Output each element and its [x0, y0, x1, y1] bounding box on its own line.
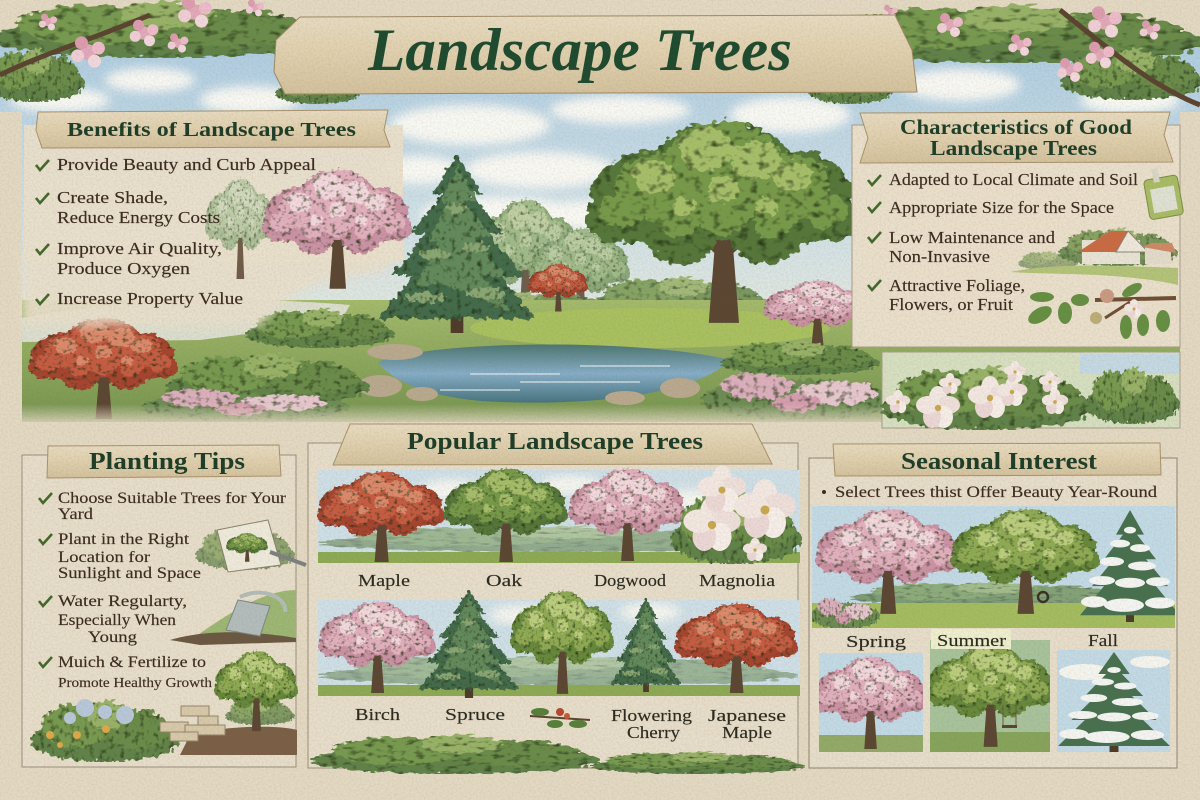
- row 1 labels: Maple: [358, 571, 410, 590]
- item: foliage: Flowers, or Fruit: [889, 295, 1013, 314]
- icon: berry sprig: [530, 708, 590, 728]
- spring tree: [815, 509, 960, 614]
- oak tree: [585, 121, 860, 323]
- tip: water: Especially When: [58, 612, 176, 629]
- tip: choose: [39, 490, 287, 523]
- tree: dogwood: [568, 469, 686, 561]
- pond reflections: [440, 366, 670, 390]
- illustration: fruit branch: [1025, 280, 1176, 339]
- benefit: air quality: [36, 239, 222, 278]
- panel background: [809, 458, 1177, 768]
- hazy tree over panel: [205, 179, 275, 279]
- benefit: shade: Create Shade,: [57, 188, 168, 207]
- sky: [0, 40, 1200, 340]
- illustration: flowering shrub strip: [880, 352, 1180, 430]
- conifer: [378, 155, 536, 333]
- illustration: young tree: [214, 651, 298, 731]
- row 2 labels: Flowering: [611, 706, 693, 725]
- benefit: air quality: Improve Air Quality,: [57, 239, 222, 258]
- item: foliage: Attractive Foliage,: [889, 276, 1025, 295]
- banner: [333, 424, 772, 465]
- row 2 labels: Spruce: [445, 705, 505, 724]
- banner: Planting Tips: [89, 449, 245, 475]
- parchment margins: [0, 112, 1200, 430]
- panel faded lower part: [22, 250, 400, 325]
- banner: Seasonal Interest: [901, 449, 1097, 475]
- row 1 labels: [358, 571, 776, 590]
- label: fall: Fall: [1088, 631, 1118, 650]
- banner: [36, 110, 390, 148]
- item: climate: Adapted to Local Climate and Soil: [889, 170, 1138, 189]
- illustration: garden bed and bricks: [30, 699, 297, 762]
- tree: birch: [318, 602, 436, 693]
- tip: choose: Choose Suitable Trees for Your: [58, 490, 287, 507]
- banner: [47, 445, 281, 478]
- banner: Landscape Trees: [930, 136, 1097, 160]
- tip: water: [39, 593, 187, 646]
- benefit: shade: Reduce Energy Costs: [57, 208, 220, 227]
- pink shrub tree: [763, 281, 871, 345]
- spring card: [819, 636, 923, 752]
- summer card: [926, 629, 1054, 752]
- panel background: [852, 125, 1180, 347]
- pond: [378, 344, 730, 403]
- tip: plant: Location for: [58, 549, 151, 566]
- tip: mulch: Promote Healthy Growth: [58, 675, 212, 690]
- rocks: [358, 344, 700, 405]
- small red tree: [528, 264, 588, 312]
- title banner: [274, 15, 917, 94]
- panel background: [308, 443, 798, 768]
- row 1 labels: Dogwood: [594, 571, 667, 590]
- tip: water: Young: [88, 629, 137, 646]
- icon: plant tag: [1142, 165, 1184, 220]
- year-round scene: [810, 506, 1180, 629]
- tip: plant: [39, 531, 201, 582]
- banner: Popular Landscape Trees: [407, 429, 703, 455]
- top-right blossom branch: [808, 5, 1200, 105]
- panel: characteristics: [852, 112, 1184, 347]
- item: size: Appropriate Size for the Space: [889, 198, 1114, 217]
- bullet line: Select Trees thist Offer Beauty Year-Round: [835, 484, 1157, 501]
- label: spring: Spring: [846, 632, 907, 651]
- row 1 scene: [317, 466, 802, 564]
- benefit: beauty: Provide Beauty and Curb Appeal: [57, 155, 316, 174]
- tip: plant: Sunlight and Space: [58, 565, 201, 582]
- summer tree: [950, 509, 1100, 614]
- tree: maple: [317, 472, 445, 562]
- tree: oak: [443, 469, 568, 562]
- panel background: [22, 455, 296, 767]
- panel: popular landscape trees: [308, 424, 805, 774]
- banner: Characteristics of Good: [900, 115, 1132, 139]
- banner: [833, 443, 1161, 476]
- clouds: [10, 68, 1180, 233]
- left stream: [22, 300, 350, 342]
- tree: japanese maple: [674, 604, 798, 693]
- tip: choose: Yard: [58, 506, 93, 523]
- tip: mulch: [39, 654, 212, 690]
- tree: second spruce: [610, 598, 682, 692]
- item: foliage: [868, 276, 1025, 314]
- item: maintenance: Non-Invasive: [889, 247, 990, 266]
- winter tree: [1080, 510, 1180, 622]
- row 2 scene: [318, 590, 800, 698]
- distant hazy trees: [380, 200, 770, 321]
- row 2 labels: [355, 705, 786, 742]
- icon: tree plan on clipboard: [195, 520, 306, 572]
- ground: [22, 300, 1180, 422]
- tree: magnolia: [670, 466, 802, 564]
- row 2 labels: Cherry: [627, 723, 681, 742]
- label: summer: Summer: [937, 631, 1006, 650]
- panel: benefits of landscape trees: [22, 110, 412, 325]
- tip: plant: Plant in the Right: [58, 531, 190, 548]
- red maple: [28, 318, 178, 419]
- illustration: house and garden: [1010, 229, 1178, 285]
- benefit: shade: [36, 188, 220, 227]
- icon: watering can: [170, 590, 296, 645]
- top-left blossom branch: [0, 0, 360, 104]
- lawn: [470, 308, 830, 348]
- item: maintenance: Low Maintenance and: [889, 228, 1056, 247]
- row 2 labels: Maple: [722, 723, 772, 742]
- row 2 labels: Birch: [355, 705, 401, 724]
- tip: mulch: Muich & Fertilize to: [58, 654, 206, 671]
- panel: seasonal interest: [809, 443, 1180, 768]
- pink tree over panel: [262, 170, 412, 289]
- tree: spruce: [418, 590, 520, 698]
- foreground shrubs: [310, 735, 805, 774]
- item: maintenance: [868, 228, 1056, 266]
- central landscape scene: [0, 40, 1200, 430]
- row 1 labels: Oak: [486, 571, 523, 590]
- tip: water: Water Regularty,: [58, 593, 187, 610]
- benefit: air quality: Produce Oxygen: [57, 259, 191, 278]
- fall card: [1057, 630, 1170, 752]
- tire swing: [1038, 592, 1048, 602]
- tree: flowering cherry: [510, 591, 614, 694]
- row 2 labels: Japanese: [708, 706, 786, 725]
- panel background: [24, 125, 403, 262]
- banner: Benefits of Landscape Trees: [67, 119, 356, 141]
- foreground flower shrubs: [140, 309, 900, 421]
- row 1 labels: Magnolia: [699, 571, 776, 590]
- title: Landscape Trees: [367, 17, 792, 83]
- benefit: property value: Increase Property Value: [57, 289, 243, 308]
- lower edge fade: [0, 404, 1200, 426]
- banner: [860, 112, 1173, 163]
- panel: planting tips: [22, 445, 306, 767]
